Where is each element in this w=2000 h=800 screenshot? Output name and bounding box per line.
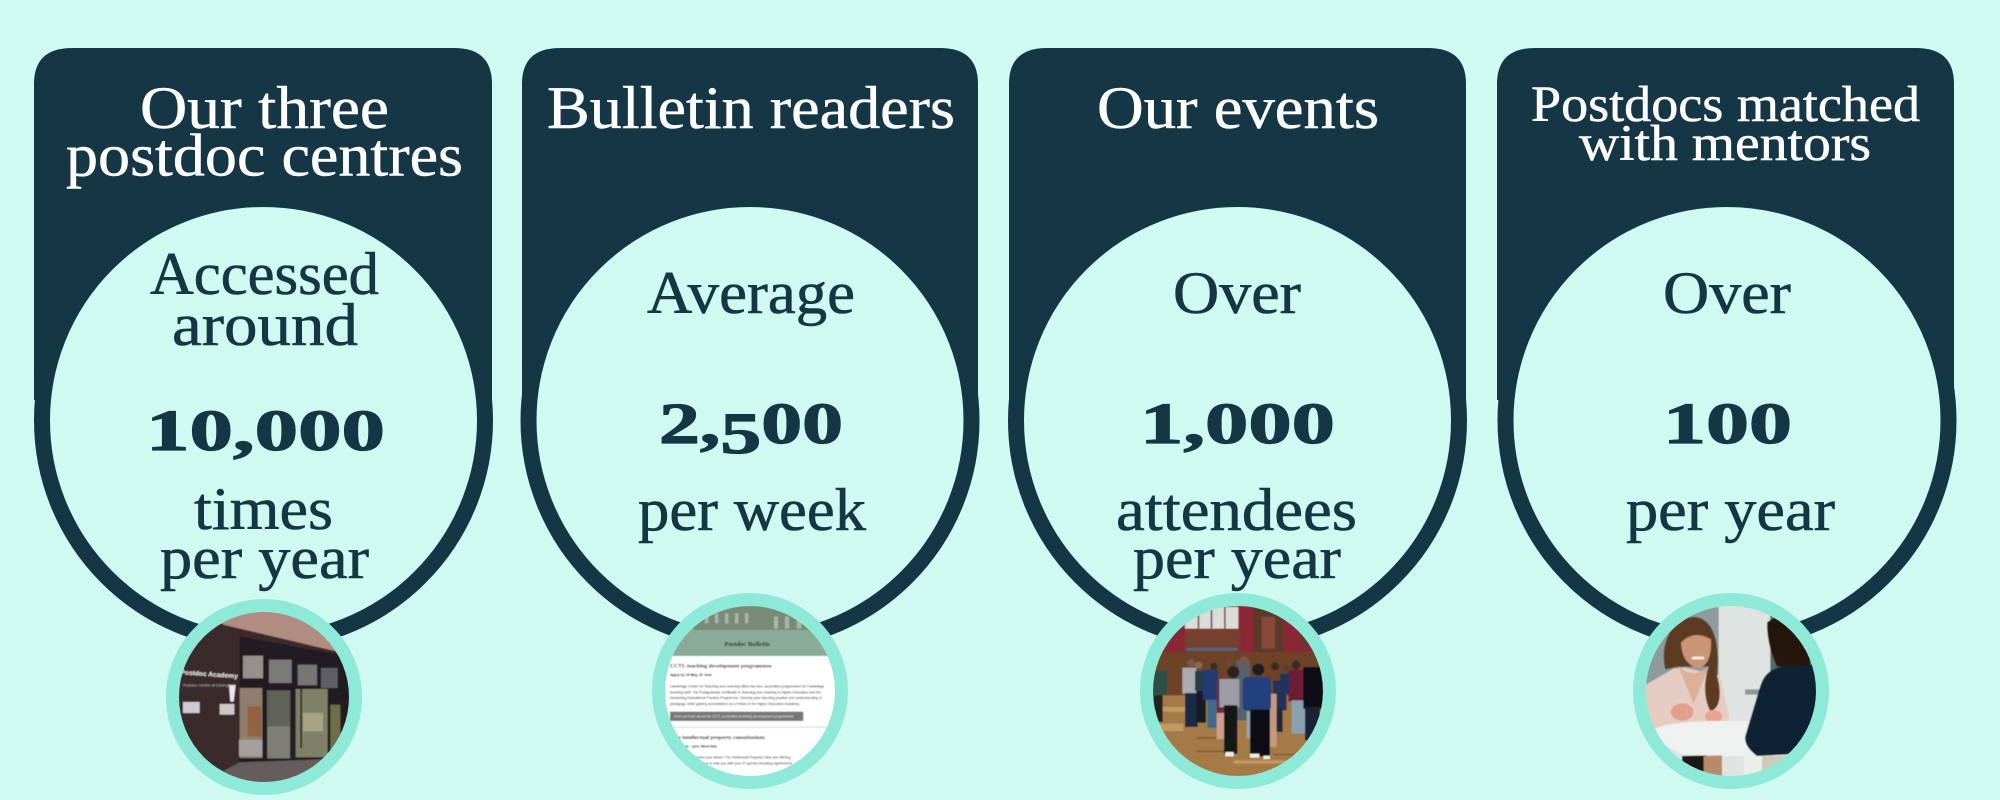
panel: postdoc centres [34, 48, 492, 795]
text: accessed around: around [172, 292, 358, 358]
text: attendees per year [1116, 477, 1357, 591]
icon: newsletter photo: Date: 10am - 1pm, West Hub [670, 744, 717, 748]
icon: newsletter photo: free one-to-one sessions to help you with your IP queries including agreements, [670, 761, 793, 765]
panel shape [522, 48, 978, 400]
icon: event photo [1140, 593, 1336, 789]
text: attendees per year: attendees [1116, 477, 1357, 543]
ring circle [528, 199, 972, 642]
panel shape [1009, 48, 1466, 400]
ring circle [1506, 199, 1948, 642]
icon: newsletter photo: Postdoc Bulletin [725, 641, 770, 648]
icon: newsletter photo: teaching staff. The Postgraduate Certificate in Teaching and Learning in Higher Education and the [670, 690, 821, 694]
heading: postdocs matched with mentors: Postdocs matched [1531, 77, 1920, 133]
number: 100: 100 [1663, 391, 1792, 456]
number: 2,500: 00 [761, 391, 843, 456]
heading: our three postdoc centres: Our three [140, 75, 389, 141]
icon: newsletter photo: Do you want to protect your ideas? The Intellectual Property Clinic are offering [670, 755, 791, 759]
number: 1,000: 1,000 [1140, 391, 1335, 456]
text: times per year: per year [160, 525, 369, 591]
text: attendees per year: per year [1133, 525, 1341, 591]
heading: our three postdoc centres: postdoc centres [66, 122, 463, 188]
icon: newsletter photo: Free intellectual property consultations [670, 735, 766, 741]
icon: newsletter photo [652, 593, 848, 789]
panel shape [34, 48, 492, 400]
text: times per year: times [194, 476, 333, 542]
icon: mentoring photo [1633, 593, 1829, 789]
text: times per year [160, 476, 369, 591]
text: per year: per year [1626, 477, 1835, 543]
icon: newsletter photo: Cambridge Centre for Teaching and Learning offers two free, accredited programmes for Cambridge [670, 684, 824, 688]
text: over: Over [1173, 260, 1301, 326]
icon: building photo: Postdoc Academy [180, 669, 238, 680]
ring circle [1016, 199, 1459, 642]
heading: our three postdoc centres [66, 75, 463, 188]
ring circle [42, 199, 485, 642]
text: over: Over [1663, 260, 1791, 326]
text: accessed around: Accessed [150, 241, 379, 307]
icon: building photo: Postdoc Centre at Eddington [183, 682, 234, 687]
panel: our events [1009, 48, 1466, 789]
icon: newsletter photo: pedagogy, while gaining accreditation as a Fellow of the Higher Education Academy. [670, 702, 800, 706]
icon: building photo [166, 599, 362, 795]
panel: bulletin readers [522, 48, 978, 789]
number: 2,500: 2, [659, 391, 702, 456]
icon: newsletter photo: Advancing Educational Practice Programme. Develop your teaching practice and understanding of [670, 696, 822, 700]
heading: bulletin readers: Bulletin readers [547, 75, 955, 141]
icon: newsletter photo: CCTL teaching development programmes [670, 664, 772, 670]
icon: newsletter photo: Apply by 16 May, 20 June [670, 673, 712, 677]
panel shape [1497, 48, 1954, 400]
text: accessed around [150, 241, 379, 358]
number: 10,000: 10,000 [146, 398, 385, 463]
heading: postdocs matched with mentors [1531, 77, 1920, 172]
icon: newsletter photo: Find out more about the CCTL accredited teaching development programmes [674, 715, 794, 719]
text: per week: per week [638, 477, 866, 543]
panel: postdocs matched with mentors [1497, 48, 1954, 789]
text: average: Average [647, 260, 855, 326]
heading: postdocs matched with mentors: with mentors [1579, 116, 1871, 172]
heading: our events: Our events [1097, 75, 1379, 141]
number: 2,500: 5 [720, 401, 761, 466]
